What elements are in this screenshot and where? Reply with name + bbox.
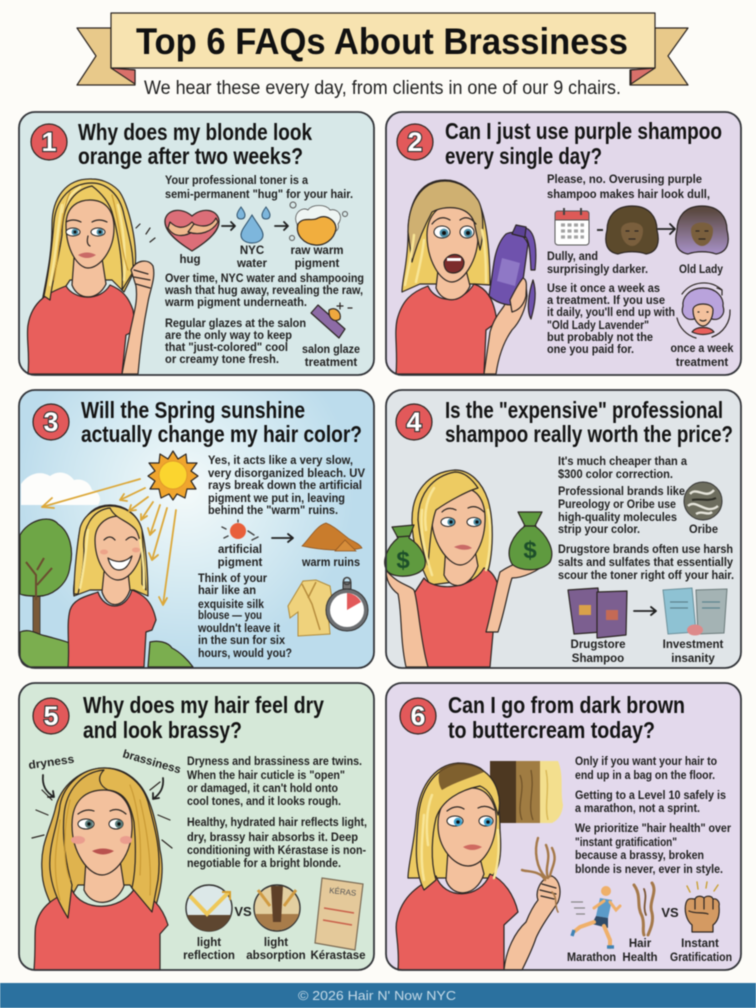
icon labels: hug [179, 254, 201, 266]
text: professional brands [558, 486, 685, 536]
text: cheaper than correction: $300 color correction. [558, 469, 673, 481]
labels: Instant [681, 938, 719, 950]
heading 6: Can I go from dark brown [448, 692, 685, 718]
text: slow bleach: behind the "warm" ruins. [208, 505, 338, 517]
labels [571, 639, 724, 665]
illustration: tree and bushes [20, 519, 193, 667]
labels: Drugstore [571, 639, 625, 651]
labels: Old Lady [679, 264, 724, 276]
text: twins: cool tones, and it looks rough. [187, 796, 341, 808]
text: silk blouse: in the sun for six [198, 635, 286, 647]
dash [597, 229, 603, 231]
arrow: dryness [43, 775, 54, 797]
text: cheaper than correction: It's much cheaper than a [558, 456, 688, 468]
text: cheaper than correction [558, 456, 688, 481]
text: regular glazes: Regular glazes at the salon [165, 318, 306, 330]
icon: foam and orange pigment [290, 202, 348, 245]
text: drugstore brands [558, 544, 734, 582]
panel: FAQ 5 dry and brassy [19, 683, 374, 970]
number badge 5: 5 [43, 701, 59, 731]
text: silk blouse: hours, would you? [198, 648, 292, 660]
icon: dull dark hair head [606, 206, 658, 254]
title banner [77, 13, 688, 85]
illustration: woman with broken hair [396, 763, 560, 970]
text: twins: When the hair cuticle is "open" [187, 770, 345, 782]
labels: Marathon [567, 952, 616, 964]
text: overusing: shampoo makes hair look dull, [547, 189, 710, 201]
text: slow bleach: very disorganized bleach. UV [208, 468, 365, 480]
icon: fist [685, 882, 719, 932]
text: prioritize: because a brassy, broken [575, 850, 704, 862]
labels: surprisingly darker. [547, 264, 648, 276]
labels: Health [622, 952, 658, 964]
text: twins: Dryness and brassiness are twins. [187, 756, 362, 768]
heading 1: Why does my blonde look [78, 119, 312, 145]
text: water washes it away: wash that hug away, revealing the raw, [164, 285, 363, 297]
icon labels [179, 245, 344, 270]
illustration: sun [148, 451, 198, 500]
label: salon glaze treatment [302, 344, 360, 369]
text: silk blouse [197, 573, 292, 660]
text: professional brands: Professional brands like [558, 486, 685, 498]
heading 2 [445, 118, 722, 169]
text: toner is a hug: semi-permanent "hug" for your hair. [165, 189, 353, 201]
text: marathon [575, 790, 726, 815]
arrow [658, 224, 675, 234]
icon: investment shampoo packs [663, 588, 727, 636]
panel: FAQ 1 blonde looks orange [19, 112, 374, 375]
text: prioritize: We prioritize "hair health" over [575, 823, 731, 835]
icon: Oribe marble circle [684, 482, 722, 520]
labels [547, 251, 724, 276]
heading 2: every single day? [445, 143, 602, 169]
text: use it once a week: "Old Lady Lavender" [547, 320, 649, 332]
text: slow bleach: Yes, it acts like a very slow, [208, 455, 353, 467]
labels [183, 937, 365, 962]
text: use it once a week [547, 283, 675, 356]
title: Top 6 FAQs About Brassiness [136, 21, 628, 62]
icon: money bag right: $ [523, 537, 537, 564]
icon: stopwatch [326, 578, 368, 631]
icon labels: pigment [295, 258, 340, 270]
text: healthy hair: conditioning with Kérastase is non- [187, 845, 366, 857]
footer [0, 983, 756, 1008]
icon labels: water [236, 258, 268, 270]
text: use it once a week: but probably not the [547, 332, 653, 344]
heading 6: to buttercream today? [448, 717, 655, 743]
text: regular glazes: are the only way to keep [165, 330, 292, 342]
labels: Gratification [670, 952, 732, 964]
label: once a week treatment: treatment [676, 357, 728, 369]
labels: light [197, 937, 221, 949]
icon: Kerastase box [315, 878, 363, 950]
illustration: woman with dry messy hair [32, 768, 172, 970]
sun ray arrows [42, 479, 176, 605]
label: salon glaze treatment: salon glaze [302, 344, 360, 356]
arrow [634, 607, 656, 615]
heading 3: actually change my hair color? [81, 421, 362, 447]
text: marathon: a marathon, not a sprint. [575, 803, 700, 815]
illustration: smiling woman [68, 505, 156, 667]
text: healthy hair: Healthy, hydrated hair reflects light, [187, 817, 367, 829]
icon: money bag left [385, 525, 425, 576]
illustration: purple shampoo bottle [489, 225, 536, 319]
text: prioritize: "instant gratification" [575, 837, 677, 849]
text: water washes it away [164, 273, 364, 309]
heading 5: Why does my hair feel dry [83, 692, 324, 718]
text: only if: end up in a bag on the floor. [575, 770, 715, 782]
icon: once a week cycle [677, 283, 730, 338]
icon: drugstore shampoo packs [568, 588, 627, 638]
icon labels: NYC [240, 245, 264, 257]
panel: FAQ 3 spring sunshine [19, 390, 374, 668]
text: twins [187, 756, 362, 808]
labels: Dully, and [547, 251, 598, 263]
labels: Hair [629, 938, 652, 950]
text: professional brands: high-quality molecules [558, 512, 677, 524]
number badge 3 [33, 404, 69, 440]
illustration: hair colour swatch [490, 761, 563, 823]
text: twins: or damaged, it can't hold onto [187, 783, 338, 795]
text: regular glazes: that "just-colored" cool [165, 342, 288, 354]
label: Oribe: Oribe [689, 524, 718, 536]
text: silk blouse: wouldn't leave it [197, 623, 280, 635]
icon: calendar [555, 208, 589, 245]
label: dryness: dryness [28, 754, 75, 772]
labels: reflection [183, 950, 235, 962]
icon: hair health strands [634, 883, 654, 935]
number badge 5 [33, 698, 69, 734]
text: only if: Only if you want your hair to [575, 756, 717, 768]
arrow [222, 222, 235, 230]
text: slow bleach: pigment we put in, leaving [208, 493, 345, 505]
text: marathon: Getting to a Level 10 safely is [575, 790, 726, 802]
label: salon glaze treatment: treatment [305, 357, 357, 369]
number badge 1 [31, 124, 67, 160]
text: healthy hair: negotiable for a bright blonde. [187, 858, 341, 870]
arrow [272, 534, 293, 542]
illustration: woman holding money bags [386, 470, 550, 667]
icon: money bag right [509, 512, 552, 570]
number badge 6: 6 [410, 701, 426, 731]
arrow [275, 222, 288, 230]
number badge 3: 3 [43, 407, 59, 437]
text: water washes it away: Over time, NYC water and shampooing [165, 273, 364, 285]
text: silk blouse: Think of your [198, 573, 267, 585]
text: water washes it away: warm pigment underneath. [164, 297, 307, 309]
label: brassiness: brassiness [121, 748, 182, 776]
heading 5 [83, 692, 324, 743]
heading 3 [81, 397, 362, 447]
illustration: worried woman [396, 180, 527, 374]
text: toner is a hug: Your professional toner is a [165, 175, 309, 187]
panel: FAQ 2 purple shampoo [386, 112, 741, 375]
text: only if [575, 756, 717, 782]
text: drugstore brands: Drugstore brands often use harsh [558, 544, 733, 556]
text: silk blouse: hair like an [198, 585, 256, 597]
arrow: brassiness [153, 778, 163, 799]
labels: insanity [671, 653, 715, 665]
text: silk blouse: blouse — you [198, 610, 262, 622]
number badge 1: 1 [41, 127, 57, 157]
text: use it once a week: it daily, you'll end up with [547, 307, 675, 319]
labels: absorption [246, 950, 306, 962]
icon: money bag left: $ [396, 547, 410, 574]
text: professional brands: Pureology or Oribe use [558, 499, 676, 511]
icon: artificial pigment [222, 520, 258, 540]
icon labels: raw warm [290, 245, 344, 257]
text: drugstore brands: salts and sulfates that essentially [558, 557, 734, 569]
labels: Kérastase [311, 950, 365, 962]
icon: old lady purple hair head [676, 206, 728, 254]
subtitle: We hear these every day, from clients in one of our 9 chairs. [144, 78, 621, 99]
text: use it once a week: one you paid for. [547, 344, 634, 356]
icon: runner [571, 886, 620, 947]
number badge 2 [397, 124, 433, 160]
panel: FAQ 6 dark brown to buttercream [386, 683, 741, 970]
text: prioritize: blonde is never, ever in style. [575, 864, 723, 876]
heading 5: and look brassy? [83, 717, 242, 743]
icon: Kerastase box: KÉRAS [329, 886, 357, 898]
text: healthy hair: dry, brassy hair absorbs it. Deep [187, 832, 358, 844]
heading 4 [445, 397, 733, 447]
labels [567, 938, 732, 964]
text: regular glazes [165, 318, 306, 366]
text: professional brands: strip your color. [558, 524, 640, 536]
text: healthy hair [187, 817, 367, 870]
labels: pigment [218, 557, 263, 569]
text: overusing: Please, no. Overusing purple [547, 174, 702, 186]
number badge 4: 4 [406, 407, 422, 437]
label: VS: VS [661, 905, 679, 920]
labels: artificial [218, 544, 262, 556]
icon: light absorption [254, 885, 300, 931]
icon: silk blouse [288, 580, 334, 636]
icon: warm ruins pile [302, 523, 362, 551]
illustration: cloud [21, 473, 100, 505]
heading 1: orange after two weeks? [78, 143, 303, 169]
number badge 4 [396, 404, 432, 440]
illustration: woman touching hair [27, 179, 155, 374]
labels: light [264, 937, 288, 949]
text: toner is a hug [165, 175, 353, 201]
text: drugstore brands: scour the toner right off your hair. [558, 570, 734, 582]
heading 3: Will the Spring sunshine [81, 397, 305, 423]
labels: Shampoo [572, 653, 624, 665]
number badge 6 [400, 698, 436, 734]
text: use it once a week: a treatment. If you use [547, 295, 665, 307]
text: prioritize [575, 823, 731, 876]
text: use it once a week: Use it once a week as [547, 283, 660, 295]
heading 6 [448, 692, 685, 743]
icon: hug heart [165, 210, 219, 251]
text: slow bleach [208, 455, 365, 517]
heading 1 [78, 119, 312, 169]
text: slow bleach: rays break down the artificial [208, 480, 362, 492]
text: regular glazes: or creamy tone fresh. [165, 354, 279, 366]
panel: FAQ 4 expensive shampoo [385, 390, 741, 668]
icon: water drops [237, 207, 270, 243]
label: once a week treatment: once a week [670, 343, 734, 355]
illustration: broken hair strands [522, 838, 558, 912]
labels [218, 544, 360, 569]
number badge 2: 2 [407, 127, 423, 157]
icon: light reflection [186, 885, 232, 931]
label: VS: VS [234, 904, 252, 919]
text: overusing [547, 174, 710, 201]
labels: warm ruins [301, 557, 360, 569]
icon: salon glaze tube [311, 303, 352, 338]
text: silk blouse: exquisite silk [198, 599, 265, 611]
footer: © 2026 Hair N' Now NYC [298, 988, 456, 1003]
label: once a week treatment [670, 343, 734, 369]
labels: Investment [663, 639, 724, 651]
